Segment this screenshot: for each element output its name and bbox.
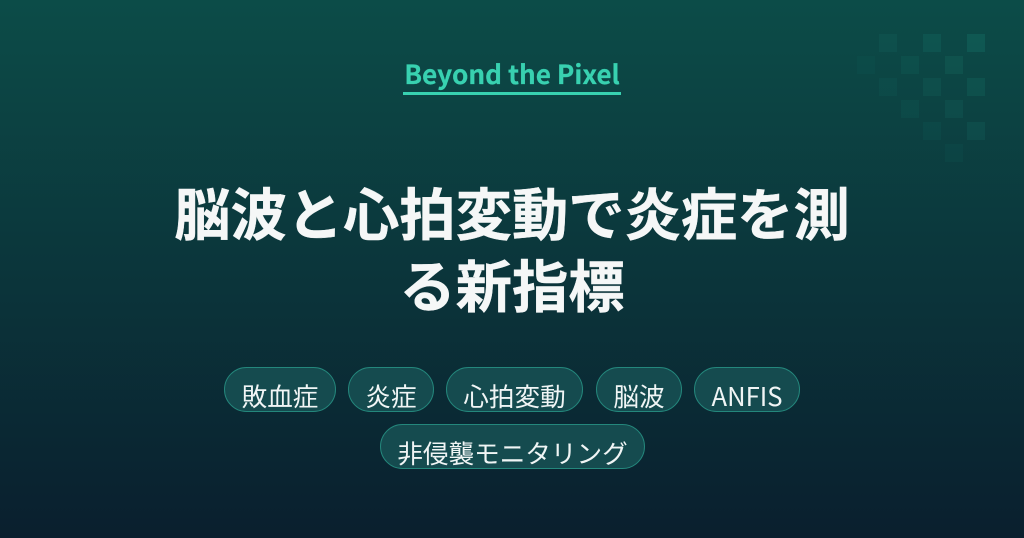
tag: inflammation: 炎症	[365, 377, 417, 414]
tag: brain waves	[596, 367, 682, 412]
tag: non-invasive monitoring	[380, 424, 645, 469]
tag: heart rate variability: 心拍変動	[463, 377, 566, 414]
title: る新指標	[399, 243, 625, 324]
tag: ANFIS	[694, 367, 800, 412]
tag: brain waves: 脳波	[613, 377, 665, 414]
tag: sepsis: 敗血症	[242, 377, 318, 414]
decorative square pattern	[923, 34, 985, 140]
tag: sepsis	[224, 367, 336, 412]
tag: heart rate variability	[446, 367, 583, 412]
tag: non-invasive monitoring: 非侵襲モニタリング	[397, 434, 628, 471]
tag: inflammation	[348, 367, 434, 412]
tag group	[224, 367, 800, 471]
brand heading with underline: Beyond the Pixel	[404, 54, 620, 92]
tag: ANFIS: ANFIS	[712, 377, 782, 414]
title	[174, 170, 850, 324]
title: 脳波と心拍変動で炎症を測	[174, 170, 850, 252]
